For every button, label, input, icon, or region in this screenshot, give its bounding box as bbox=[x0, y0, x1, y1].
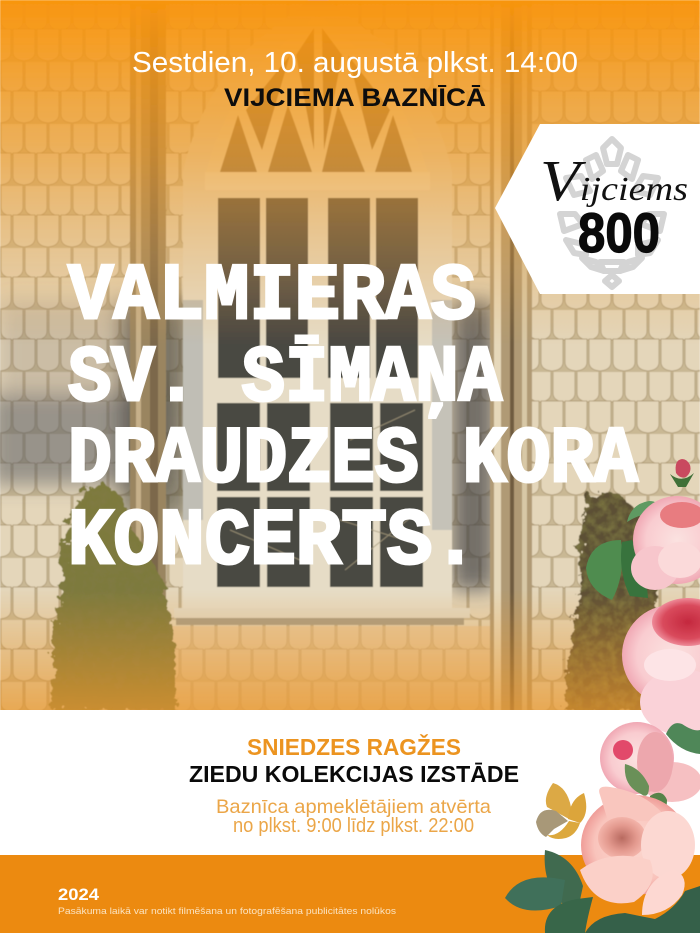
green leaves at the bottom bbox=[505, 850, 700, 933]
exhibition heading black: ZIEDU KOLEKCIJAS IZSTĀDE bbox=[189, 761, 519, 787]
opening hours bbox=[216, 796, 491, 837]
pilasters bbox=[130, 0, 166, 712]
red centred rose bbox=[622, 598, 700, 735]
orange footer band bbox=[0, 855, 700, 933]
main title: DRAUDZES KORA bbox=[68, 415, 639, 506]
number 800: 800 bbox=[578, 201, 660, 264]
main title bbox=[68, 252, 639, 588]
background photo: church wall and window bbox=[0, 0, 700, 712]
opening hours: Baznīca apmeklētājiem atvērta bbox=[216, 796, 491, 818]
colour gradients on photo bbox=[0, 0, 700, 345]
pink rose top bbox=[631, 496, 700, 590]
pine cone mark bbox=[560, 139, 664, 287]
window panes bbox=[217, 198, 423, 587]
window sill bbox=[174, 608, 470, 618]
year: 2024 bbox=[58, 885, 100, 904]
exhibition heading orange: SNIEDZES RAGŽES bbox=[247, 733, 461, 760]
opening hours: no plkst. 9:00 līdz plkst. 22:00 bbox=[233, 815, 474, 837]
shaded frame edges bbox=[183, 300, 203, 520]
window surround with gothic arch bbox=[183, 0, 452, 610]
filming disclaimer: Pasākuma laikā var notikt filmēšana un fotografēšana publicitātes nolūkos bbox=[58, 906, 396, 917]
small rose bbox=[600, 722, 700, 802]
main title: SV. SĪMAŅA bbox=[68, 334, 503, 425]
bushes bbox=[52, 485, 660, 712]
lower shingles band tone bbox=[170, 626, 490, 712]
butterfly icon bbox=[536, 783, 586, 839]
white exhibition band bbox=[0, 710, 700, 856]
gothic arch panes bbox=[220, 28, 412, 172]
leaves beside top rose bbox=[586, 501, 659, 600]
large rose bbox=[580, 787, 695, 915]
leaves on small rose bbox=[625, 723, 700, 817]
script wordmark: Vijciems bbox=[540, 148, 688, 213]
main title: VALMIERAS bbox=[68, 252, 476, 343]
rose bud bbox=[670, 459, 694, 487]
venue line: VIJCIEMA BAZNĪCĀ bbox=[224, 84, 486, 112]
grey weathered streak on the wall bbox=[0, 300, 494, 590]
roses upper bouquet bbox=[580, 459, 700, 915]
logo badge: Vijciems 800 bbox=[495, 124, 700, 294]
main title: KONCERTS. bbox=[68, 497, 478, 588]
date line: Sestdien, 10. augustā plkst. 14:00 bbox=[132, 47, 578, 79]
